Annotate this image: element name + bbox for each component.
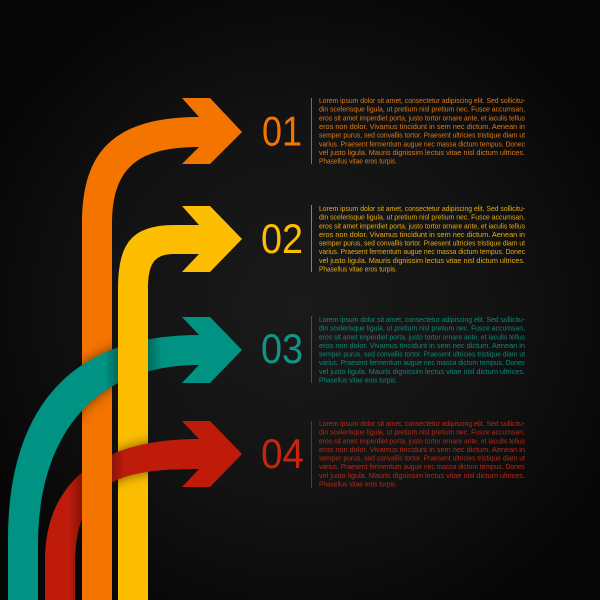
text block 02: Lorem ipsum dolor sit amet, consectetur adipiscing elit. Sed sollicitu- [319,204,526,213]
text block 02: varius. Praesent fermentum augue nec massa dictum tempus. Donec [319,247,525,256]
arrow: teal 03 [8,317,242,600]
shadows of yellow strip on teal [107,338,159,389]
number 03: 03 [261,325,303,372]
text block 03: Phasellus vitae eros turpis. [319,376,397,384]
arrow: orange 01 [82,98,242,425]
text block 02: Phasellus vitae eros turpis. [319,264,397,274]
number 01: 01 [262,108,302,154]
text block 02: semper purus, sed convallis tortor. Praesent ultricies tristique diam ut [319,239,525,248]
text block 04: vel justo ligula. Mauris dignissim lectus vitae nisl dictum ultrices. [319,471,525,480]
text block 04: din scelerisque ligula, ut pretium nisl pretium nec. Fusce accumsan, [319,428,525,437]
number 04: 04 [261,430,304,477]
orange strip passing over red [82,425,112,600]
text block 04: varius. Praesent fermentum augue nec massa dictum tempus. Donec [319,462,525,471]
text block 03: eros sit amet imperdiet porta, justo tortor ornare ante, et iaculis tellus [319,332,525,341]
number 02: 02 [261,215,303,262]
text block 04: eros non dolor. Vivamus tincidunt in sem nec dictum. Aenean in [319,445,525,454]
text block 01: vel justo ligula. Mauris dignissim lectus vitae nisl dictum ultrices. [319,148,525,157]
text block 03 [311,315,526,384]
text block 04: eros sit amet imperdiet porta, justo tortor ornare ante, et iaculis tellus [319,436,525,445]
text block 01: eros sit amet imperdiet porta, justo tortor ornare ante, et iaculis tellus [319,113,525,122]
arrow: red 04 [45,421,242,600]
shadows of orange strip on red [70,450,123,600]
text block 02: eros sit amet imperdiet porta, justo tortor ornare ante, et iaculis tellus [319,221,525,230]
text block 04: semper purus, sed convallis tortor. Praesent ultricies tristique diam ut [319,454,525,463]
text block 01: Lorem ipsum dolor sit amet, consectetur adipiscing elit. Sed sollicitu- [319,96,526,105]
text block 04: Lorem ipsum dolor sit amet, consectetur adipiscing elit. Sed sollicitu- [319,419,526,428]
text block 01: din scelerisque ligula, ut pretium nisl pretium nec. Fusce accumsan, [319,105,525,114]
text block 01: varius. Praesent fermentum augue nec massa dictum tempus. Donec [319,139,525,148]
text block 03: semper purus, sed convallis tortor. Praesent ultricies tristique diam ut [319,350,525,359]
text block 02 [311,204,526,274]
text block 02: din scelerisque ligula, ut pretium nisl pretium nec. Fusce accumsan, [319,213,525,222]
text block 01: semper purus, sed convallis tortor. Praesent ultricies tristique diam ut [319,131,525,140]
arrow: yellow 02 [118,206,242,600]
text block 03: Lorem ipsum dolor sit amet, consectetur adipiscing elit. Sed sollicitu- [319,315,526,324]
text block 01: eros non dolor. Vivamus tincidunt in sem nec dictum. Aenean in [319,122,525,131]
text block 03: vel justo ligula. Mauris dignissim lectus vitae nisl dictum ultrices. [319,367,525,376]
text block 04 [311,419,526,488]
text block 02: vel justo ligula. Mauris dignissim lectus vitae nisl dictum ultrices. [319,256,525,265]
shadow of teal on orange strip [82,340,112,424]
text block 03: eros non dolor. Vivamus tincidunt in sem nec dictum. Aenean in [319,341,525,350]
text block 01 [311,96,526,166]
text block 01: Phasellus vitae eros turpis. [319,157,397,166]
shadow of red on yellow strip [118,434,148,490]
text block 02: eros non dolor. Vivamus tincidunt in sem nec dictum. Aenean in [319,230,525,239]
text block 04: Phasellus vitae eros turpis. [319,480,397,488]
text block 03: din scelerisque ligula, ut pretium nisl pretium nec. Fusce accumsan, [319,324,525,333]
text block 03: varius. Praesent fermentum augue nec massa dictum tempus. Donec [319,358,525,367]
